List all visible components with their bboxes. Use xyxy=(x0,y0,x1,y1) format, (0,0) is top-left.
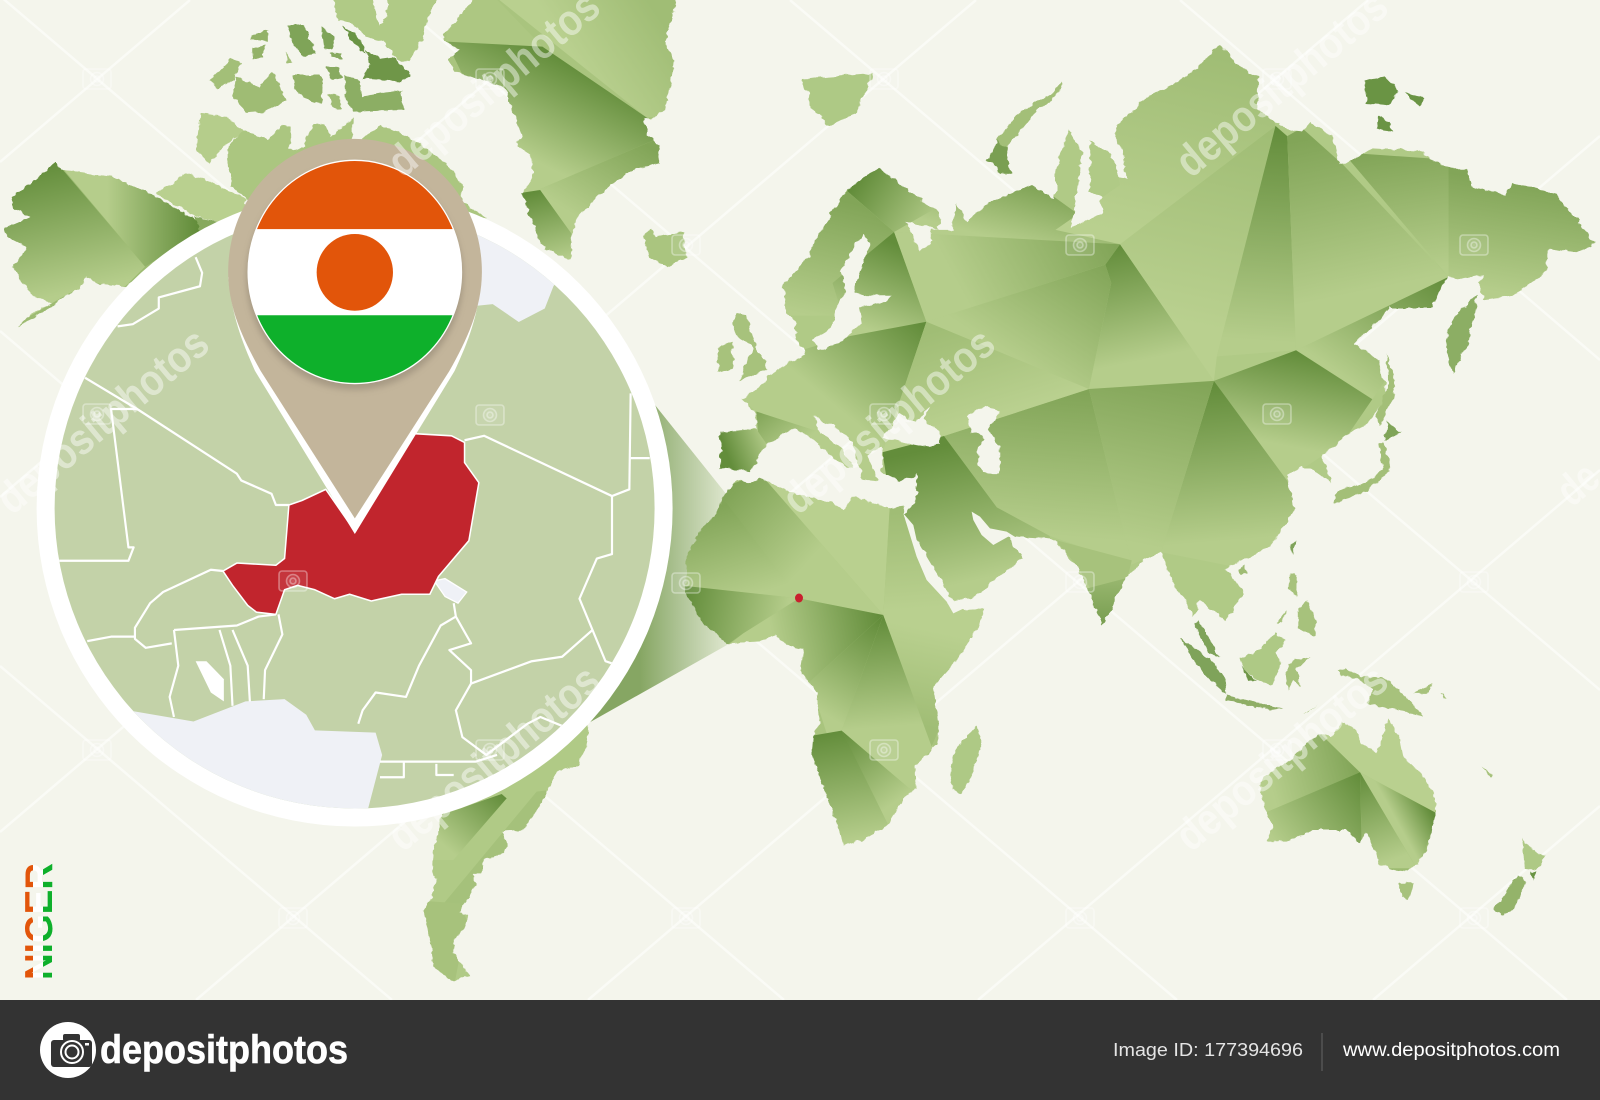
south america xyxy=(422,725,590,982)
watermark text: depositphotos xyxy=(378,655,609,861)
pin white outline xyxy=(228,277,482,534)
north america: alaska xyxy=(4,162,200,328)
white ring xyxy=(37,190,673,826)
eurasia polygonal facets xyxy=(680,30,1600,642)
map pin with niger flag xyxy=(228,139,482,534)
africa and madagascar xyxy=(673,470,1020,853)
indonesian and philippine islands xyxy=(1180,540,1493,777)
flag xyxy=(246,157,467,387)
pin body xyxy=(228,139,482,518)
niger highlighted xyxy=(223,434,479,614)
iceland xyxy=(643,228,687,267)
watermark text: depositphotos xyxy=(773,318,1004,524)
zoomed map xyxy=(54,234,655,808)
flag shadow xyxy=(246,165,463,390)
lake chad xyxy=(434,579,467,603)
country borders xyxy=(59,257,650,777)
vertical country name: NIGER xyxy=(18,863,61,980)
red location dot xyxy=(795,594,803,602)
magnifier circle: regional map xyxy=(37,190,673,844)
greenland xyxy=(437,0,687,267)
watermark text: depositphotos xyxy=(1166,655,1397,861)
footer logo icon xyxy=(40,1022,96,1078)
southeast asia and oceania xyxy=(1180,540,1545,915)
footer logo wordmark: depositphotos xyxy=(100,1028,348,1072)
image id: Image ID: 177394696 xyxy=(1113,1039,1303,1060)
footer bar xyxy=(0,1000,1600,1100)
red sea and persian gulf xyxy=(903,512,1020,613)
watermark camera icons xyxy=(83,69,1488,928)
gulf of guinea xyxy=(134,699,382,808)
lake volta xyxy=(196,661,224,701)
mediterranean sea xyxy=(477,235,554,322)
watermark text xyxy=(0,0,1600,861)
inland seas xyxy=(812,236,1000,473)
arctic and pacific islands of eurasia xyxy=(718,73,1478,503)
australia xyxy=(1260,718,1436,872)
zoom cone from circle to africa xyxy=(585,405,727,725)
tasmania and new zealand xyxy=(1398,838,1545,915)
website: www.depositphotos.com xyxy=(1342,1040,1560,1061)
north america: canada and arctic islands xyxy=(156,0,487,232)
